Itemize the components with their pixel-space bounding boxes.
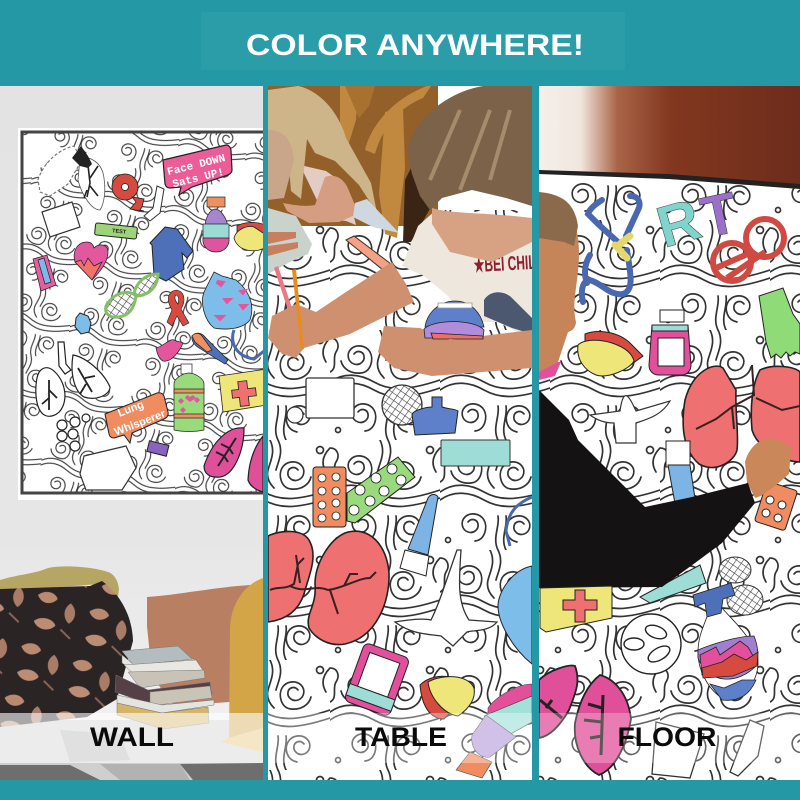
- teal and pink strip behind head: [539, 330, 561, 380]
- teal mask: [441, 440, 510, 466]
- icon: inhaler tube: [33, 255, 56, 291]
- crayon tray: [268, 208, 312, 274]
- basket: [0, 581, 133, 727]
- icon: thermometer: [192, 333, 228, 364]
- pink medicine bottle: [649, 310, 691, 375]
- boy shirt: [402, 210, 532, 340]
- letters RT: R: [650, 186, 708, 260]
- first aid kit: [540, 586, 612, 632]
- label band: table: [268, 713, 532, 763]
- poster on wall: [18, 128, 268, 500]
- panel: table: [268, 86, 536, 780]
- inhaler: [730, 720, 764, 776]
- speech bubble: face down sats up: Sats UP!: [171, 167, 226, 191]
- caduceus: [395, 550, 497, 646]
- speech bubble: lung whisperer: Whisperer: [113, 408, 168, 438]
- icon: ribbon: [167, 290, 189, 326]
- icon: DNA: [106, 274, 158, 317]
- icon: lips: [156, 340, 183, 361]
- green pill card: [347, 457, 415, 523]
- label: WALL: WALL: [90, 722, 174, 752]
- panel: wall: [0, 86, 268, 780]
- hatched balloon: [719, 557, 763, 615]
- hand on poster: [745, 438, 791, 498]
- blanket on basket: [0, 566, 119, 597]
- icon: test tube: [94, 223, 138, 239]
- floor rug: [0, 720, 263, 780]
- letters RT: [650, 180, 743, 260]
- armchair: [221, 578, 263, 752]
- label band: floor: [539, 713, 800, 763]
- cushion: [147, 585, 256, 706]
- poster edge: [539, 171, 800, 188]
- icon: floral cluster: [38, 146, 82, 196]
- red glasses: [713, 219, 784, 281]
- title text: COLOR ANYWHERE!: [246, 29, 584, 62]
- girl: [268, 86, 399, 233]
- icon: O2: [112, 174, 144, 211]
- wooden chairs background: [268, 86, 438, 242]
- icon: lab coat: [150, 227, 193, 281]
- shirt print: ★BEI CHIL: [473, 252, 536, 277]
- red lungs: [683, 365, 800, 467]
- speech bubble: face down sats up: Face DOWN: [166, 153, 227, 179]
- boy head: [407, 86, 532, 262]
- shirt print: [473, 252, 536, 334]
- wood floor: [539, 86, 800, 187]
- pencil: [292, 269, 304, 350]
- orange pill card: [313, 467, 346, 527]
- icon: pulse oximeter drop: [75, 313, 91, 334]
- vase in colour: [424, 301, 484, 339]
- striped bottle: [456, 684, 532, 778]
- green card under sleeve: [684, 512, 726, 556]
- icon: test tube: TEST: [112, 228, 127, 236]
- blue heart partial: [498, 566, 532, 664]
- icon: blue tube: [233, 330, 264, 359]
- icon: yellow mask: [234, 222, 266, 251]
- icon: heart: [74, 242, 108, 280]
- blue bottle cap: [412, 397, 458, 435]
- icon: blue heart: [202, 272, 252, 329]
- icon: specimen jar: [42, 202, 80, 237]
- blue test tube: [400, 494, 438, 576]
- pink ruler drawing: [274, 236, 391, 310]
- label band: wall: [0, 713, 263, 763]
- blue test tube: [666, 441, 696, 509]
- label: TABLE: TABLE: [355, 722, 447, 752]
- title banner: [201, 12, 625, 70]
- icon: pink lungs: [204, 428, 263, 492]
- caduceus: [590, 396, 670, 443]
- book stack: [115, 646, 214, 729]
- medicine pouch: [652, 722, 704, 778]
- speech bubble: lung whisperer: Lung: [116, 399, 146, 420]
- icon: lungs outline: [36, 342, 110, 416]
- striped vase: [693, 583, 758, 700]
- pink lungs: [539, 666, 631, 775]
- pink device: [344, 642, 410, 717]
- icon: scale: [80, 446, 136, 490]
- icon: spray bottle: [203, 197, 229, 252]
- oval cell circle: [621, 614, 681, 674]
- blue stethoscope tube: [506, 497, 532, 546]
- label: FLOOR: FLOOR: [618, 722, 716, 752]
- icon: green bottle: [174, 364, 204, 432]
- green glove: [759, 288, 800, 358]
- boy arm and hand: [268, 262, 532, 376]
- teal mask under sleeve: [640, 565, 706, 603]
- blood pressure cuff: [287, 378, 422, 425]
- icon: cell cluster: [57, 414, 90, 451]
- icon: purple tag: [147, 441, 169, 456]
- icon: first aid kit: [219, 369, 267, 412]
- letters RT: T: [695, 180, 743, 251]
- speech bubble: face down sats up: [163, 145, 232, 195]
- yellow mask: [420, 676, 474, 719]
- yellow mask: [578, 332, 643, 376]
- icon: inhaler: [144, 186, 164, 221]
- kidneys red lungs: [268, 531, 389, 645]
- stethoscope: [582, 196, 640, 302]
- black sleeve: [539, 390, 755, 588]
- speech bubble: lung whisperer: [105, 393, 168, 443]
- panel: floor: [539, 86, 800, 780]
- child head: [539, 192, 579, 372]
- icon: black lung: [72, 146, 105, 210]
- orange pill card: [754, 481, 798, 531]
